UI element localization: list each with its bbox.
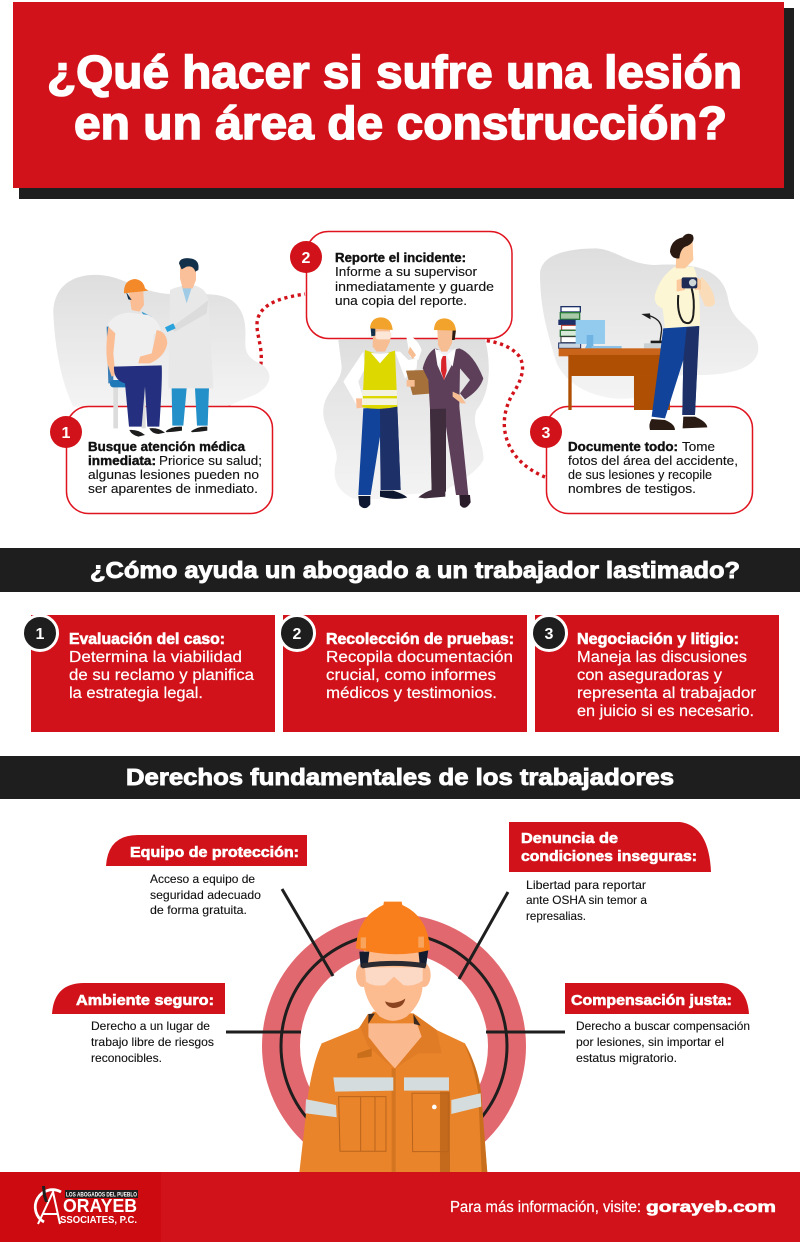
footer bbox=[0, 1172, 800, 1242]
title: ¿Qué hacer si sufre una lesión bbox=[47, 46, 742, 98]
description: Acceso a equipo de bbox=[150, 872, 255, 886]
description: reconocibles. bbox=[91, 1051, 162, 1065]
step 3 text: fotos del área del accidente, bbox=[568, 454, 738, 468]
description: por lesiones, sin importar el bbox=[576, 1035, 724, 1049]
panel: step 1 seek medical care bbox=[50, 258, 272, 514]
illustration: patient and doctor bbox=[106, 258, 213, 437]
description: seguridad adecuado bbox=[150, 888, 261, 902]
website link text: gorayeb.com bbox=[646, 1199, 776, 1216]
description bbox=[91, 1019, 214, 1065]
card text: Recopila documentación bbox=[326, 649, 513, 666]
step 2 text bbox=[335, 251, 494, 308]
panel: unsafe conditions complaint: Denuncia de bbox=[521, 830, 618, 847]
step 2 text: inmediatamente y guarde bbox=[335, 280, 494, 294]
description bbox=[526, 878, 647, 923]
logo bbox=[35, 1186, 138, 1226]
step 2 text: Informe a su supervisor bbox=[335, 265, 477, 279]
description: Derecho a buscar compensación bbox=[576, 1019, 750, 1033]
description: trabajo libre de riesgos bbox=[91, 1035, 214, 1049]
panel: case evaluation card bbox=[22, 615, 275, 732]
step 1 text bbox=[88, 440, 262, 496]
card text: Recolección de pruebas: bbox=[326, 631, 514, 648]
step 1 text: Priorice su salud; bbox=[159, 454, 262, 468]
background blob 1 bbox=[53, 275, 269, 407]
panel: unsafe conditions complaint: condiciones inseguras: bbox=[521, 848, 697, 865]
step 3 text: Documente todo: bbox=[568, 440, 678, 454]
step 3 text: de sus lesiones y recopile bbox=[568, 468, 712, 482]
card text bbox=[69, 631, 254, 702]
connector lines bbox=[226, 889, 565, 1032]
description bbox=[576, 1019, 750, 1065]
panel: safe environment bbox=[52, 983, 225, 1065]
card text bbox=[577, 631, 756, 720]
step 1 text: algunas lesiones pueden no bbox=[88, 468, 259, 482]
card text: Evaluación del caso: bbox=[69, 631, 225, 648]
step 2 text: Reporte el incidente: bbox=[335, 251, 466, 265]
background blob 3 bbox=[540, 248, 758, 399]
illustration: desk and photographer bbox=[558, 234, 715, 430]
card text: en juicio si es necesario. bbox=[577, 703, 754, 720]
description bbox=[150, 872, 261, 917]
illustration: worker with helmet bbox=[299, 902, 487, 1173]
step 3 text bbox=[568, 440, 738, 496]
step 3 text: nombres de testigos. bbox=[568, 482, 696, 496]
panel: protective equipment bbox=[106, 835, 307, 917]
heading: how a lawyer helps bbox=[0, 548, 800, 592]
number badge bbox=[532, 616, 566, 650]
number badge bbox=[22, 616, 58, 650]
dotted connector 2 to 3 bbox=[480, 340, 545, 477]
panel: safe environment: Ambiente seguro: bbox=[76, 992, 214, 1009]
number badge 3 bbox=[530, 416, 562, 448]
description: represalias. bbox=[526, 909, 586, 923]
logo: ORAYEB bbox=[63, 1196, 137, 1216]
panel: evidence collection card bbox=[280, 615, 527, 732]
callout box 1 bbox=[66, 406, 272, 514]
title banner bbox=[13, 2, 794, 199]
logo: LOS ABOGADOS DEL PUEBLO bbox=[66, 1192, 137, 1198]
title bbox=[47, 46, 742, 149]
card text: crucial, como informes bbox=[326, 667, 496, 684]
card text: médicos y testimonios. bbox=[326, 685, 497, 702]
description: Libertad para reportar bbox=[526, 878, 646, 892]
description: de forma gratuita. bbox=[150, 903, 247, 917]
callout box 3 bbox=[546, 406, 752, 514]
panel: fair compensation bbox=[565, 983, 750, 1065]
card text: Maneja las discusiones bbox=[577, 649, 747, 666]
panel: protective equipment: Equipo de protección: bbox=[130, 844, 299, 861]
number badge 2 bbox=[290, 241, 322, 273]
description: estatus migratorio. bbox=[576, 1051, 677, 1065]
number badge: 3 bbox=[545, 626, 554, 643]
step 3 text: Tome bbox=[682, 440, 715, 454]
description: Derecho a un lugar de bbox=[91, 1019, 210, 1033]
number badge 3: 3 bbox=[542, 425, 551, 442]
step 1 text: inmediata: bbox=[88, 454, 156, 468]
panel: negotiation card bbox=[532, 615, 779, 732]
panel: step 3 document everything bbox=[530, 234, 758, 514]
number badge 1 bbox=[50, 416, 82, 448]
description: ante OSHA sin temor a bbox=[526, 893, 647, 907]
dotted connector 1 to 2 bbox=[227, 294, 305, 405]
card text bbox=[326, 631, 514, 702]
panel: unsafe conditions complaint bbox=[509, 822, 711, 923]
panel: step 2 report the incident bbox=[290, 232, 512, 508]
card text: representa al trabajador bbox=[577, 685, 756, 702]
card text: con aseguradoras y bbox=[577, 667, 722, 684]
heading: how a lawyer helps: ¿Cómo ayuda un abogado a un trabajador lastimado? bbox=[90, 557, 740, 583]
panel: fair compensation: Compensación justa: bbox=[571, 992, 732, 1009]
step 2 text: una copia del reporte. bbox=[335, 294, 467, 308]
number badge bbox=[280, 616, 314, 650]
number badge 1: 1 bbox=[62, 425, 71, 442]
step 1 text: Busque atención médica bbox=[88, 440, 246, 454]
number badge: 2 bbox=[293, 626, 302, 643]
website link text bbox=[450, 1199, 776, 1216]
number badge 2: 2 bbox=[302, 250, 311, 267]
card text: de su reclamo y planifica bbox=[69, 667, 254, 684]
illustration: worker and manager bbox=[343, 317, 483, 508]
logo: SSOCIATES, P.C. bbox=[60, 1215, 137, 1226]
heading: fundamental rights: Derechos fundamentales de los trabajadores bbox=[126, 764, 674, 790]
card text: Determina la viabilidad bbox=[69, 649, 242, 666]
title: en un área de construcción? bbox=[74, 97, 727, 149]
card text: la estrategia legal. bbox=[69, 685, 203, 702]
card text: Negociación y litigio: bbox=[577, 631, 739, 648]
number badge: 1 bbox=[36, 626, 45, 643]
step 1 text: ser aparentes de inmediato. bbox=[88, 482, 258, 496]
heading: fundamental rights bbox=[0, 756, 800, 799]
background blob 2 bbox=[323, 338, 489, 499]
callout box 2 bbox=[306, 232, 512, 338]
website link text: Para más información, visite: bbox=[450, 1199, 641, 1216]
red ring behind worker bbox=[281, 933, 507, 1159]
